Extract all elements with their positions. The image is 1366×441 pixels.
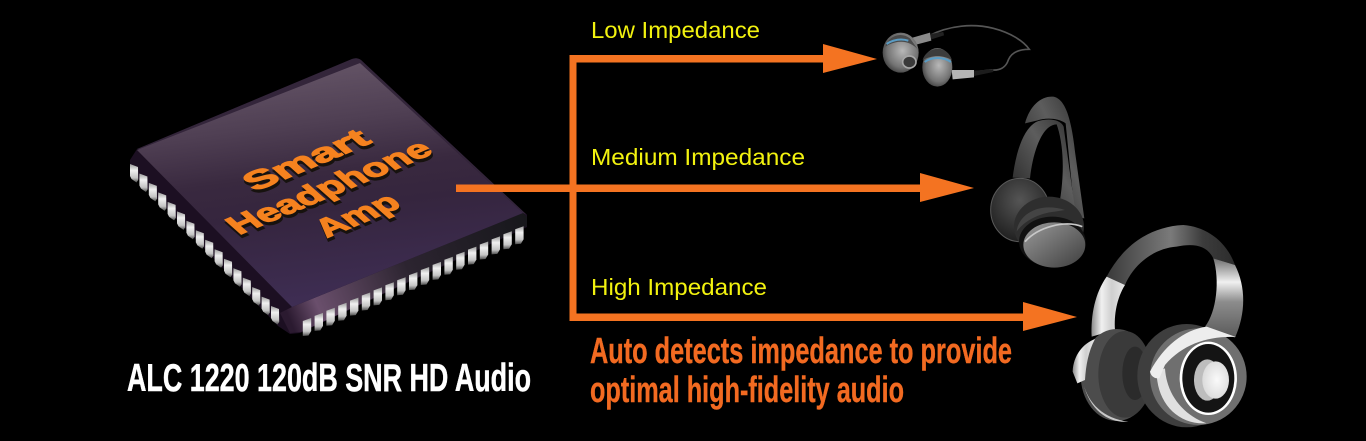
arrow: low impedance (570, 44, 877, 73)
arrow: chip output stem (456, 184, 571, 192)
chip top edge (137, 58, 527, 215)
earbud stems (910, 33, 931, 45)
icon: large headphones (1073, 225, 1247, 427)
chip label: Headphone (218, 134, 440, 240)
callout: auto detect: optimal high-fidelity audio (590, 369, 904, 410)
chip: Smart Headphone Amp (130, 58, 527, 336)
front ear cup (1137, 324, 1247, 427)
chip label shadow: Smart (235, 126, 379, 199)
rear ear cup (991, 178, 1049, 242)
callout: auto detect: Auto detects impedance to provide (590, 330, 1012, 371)
chip top face (137, 63, 523, 307)
label: high impedance: High Impedance (591, 274, 767, 300)
arrow: medium impedance (570, 173, 974, 202)
callout: auto detect (590, 330, 1012, 410)
right pins (303, 226, 524, 336)
arrow: vertical bus (570, 55, 576, 321)
arrows (456, 44, 1077, 331)
headband right slider (1205, 258, 1243, 338)
headband rear (1025, 97, 1084, 218)
earbud one (883, 33, 919, 73)
left pins (130, 164, 279, 324)
arrow: high impedance (570, 302, 1077, 331)
caption: chip name: ALC 1220 120dB SNR HD Audio (127, 357, 531, 400)
headband top (1107, 225, 1235, 285)
earbud two (922, 48, 952, 87)
chip bevel (280, 213, 527, 333)
chip label shadow: Amp (307, 190, 409, 246)
label: low impedance: Low Impedance (591, 17, 760, 43)
icon: earbuds (883, 26, 1029, 87)
chip label shadow: Headphone (219, 137, 441, 243)
chip label: Smart (234, 123, 378, 196)
earbud cable (928, 26, 1029, 72)
chip label: Amp (306, 187, 408, 243)
label: medium impedance: Medium Impedance (591, 144, 805, 170)
headband left slider (1092, 277, 1125, 337)
chip body (130, 58, 527, 334)
headband front (1013, 119, 1076, 218)
front ear cup (1014, 197, 1086, 268)
rear ear cup (1073, 329, 1153, 422)
icon: medium headphones (991, 97, 1086, 268)
